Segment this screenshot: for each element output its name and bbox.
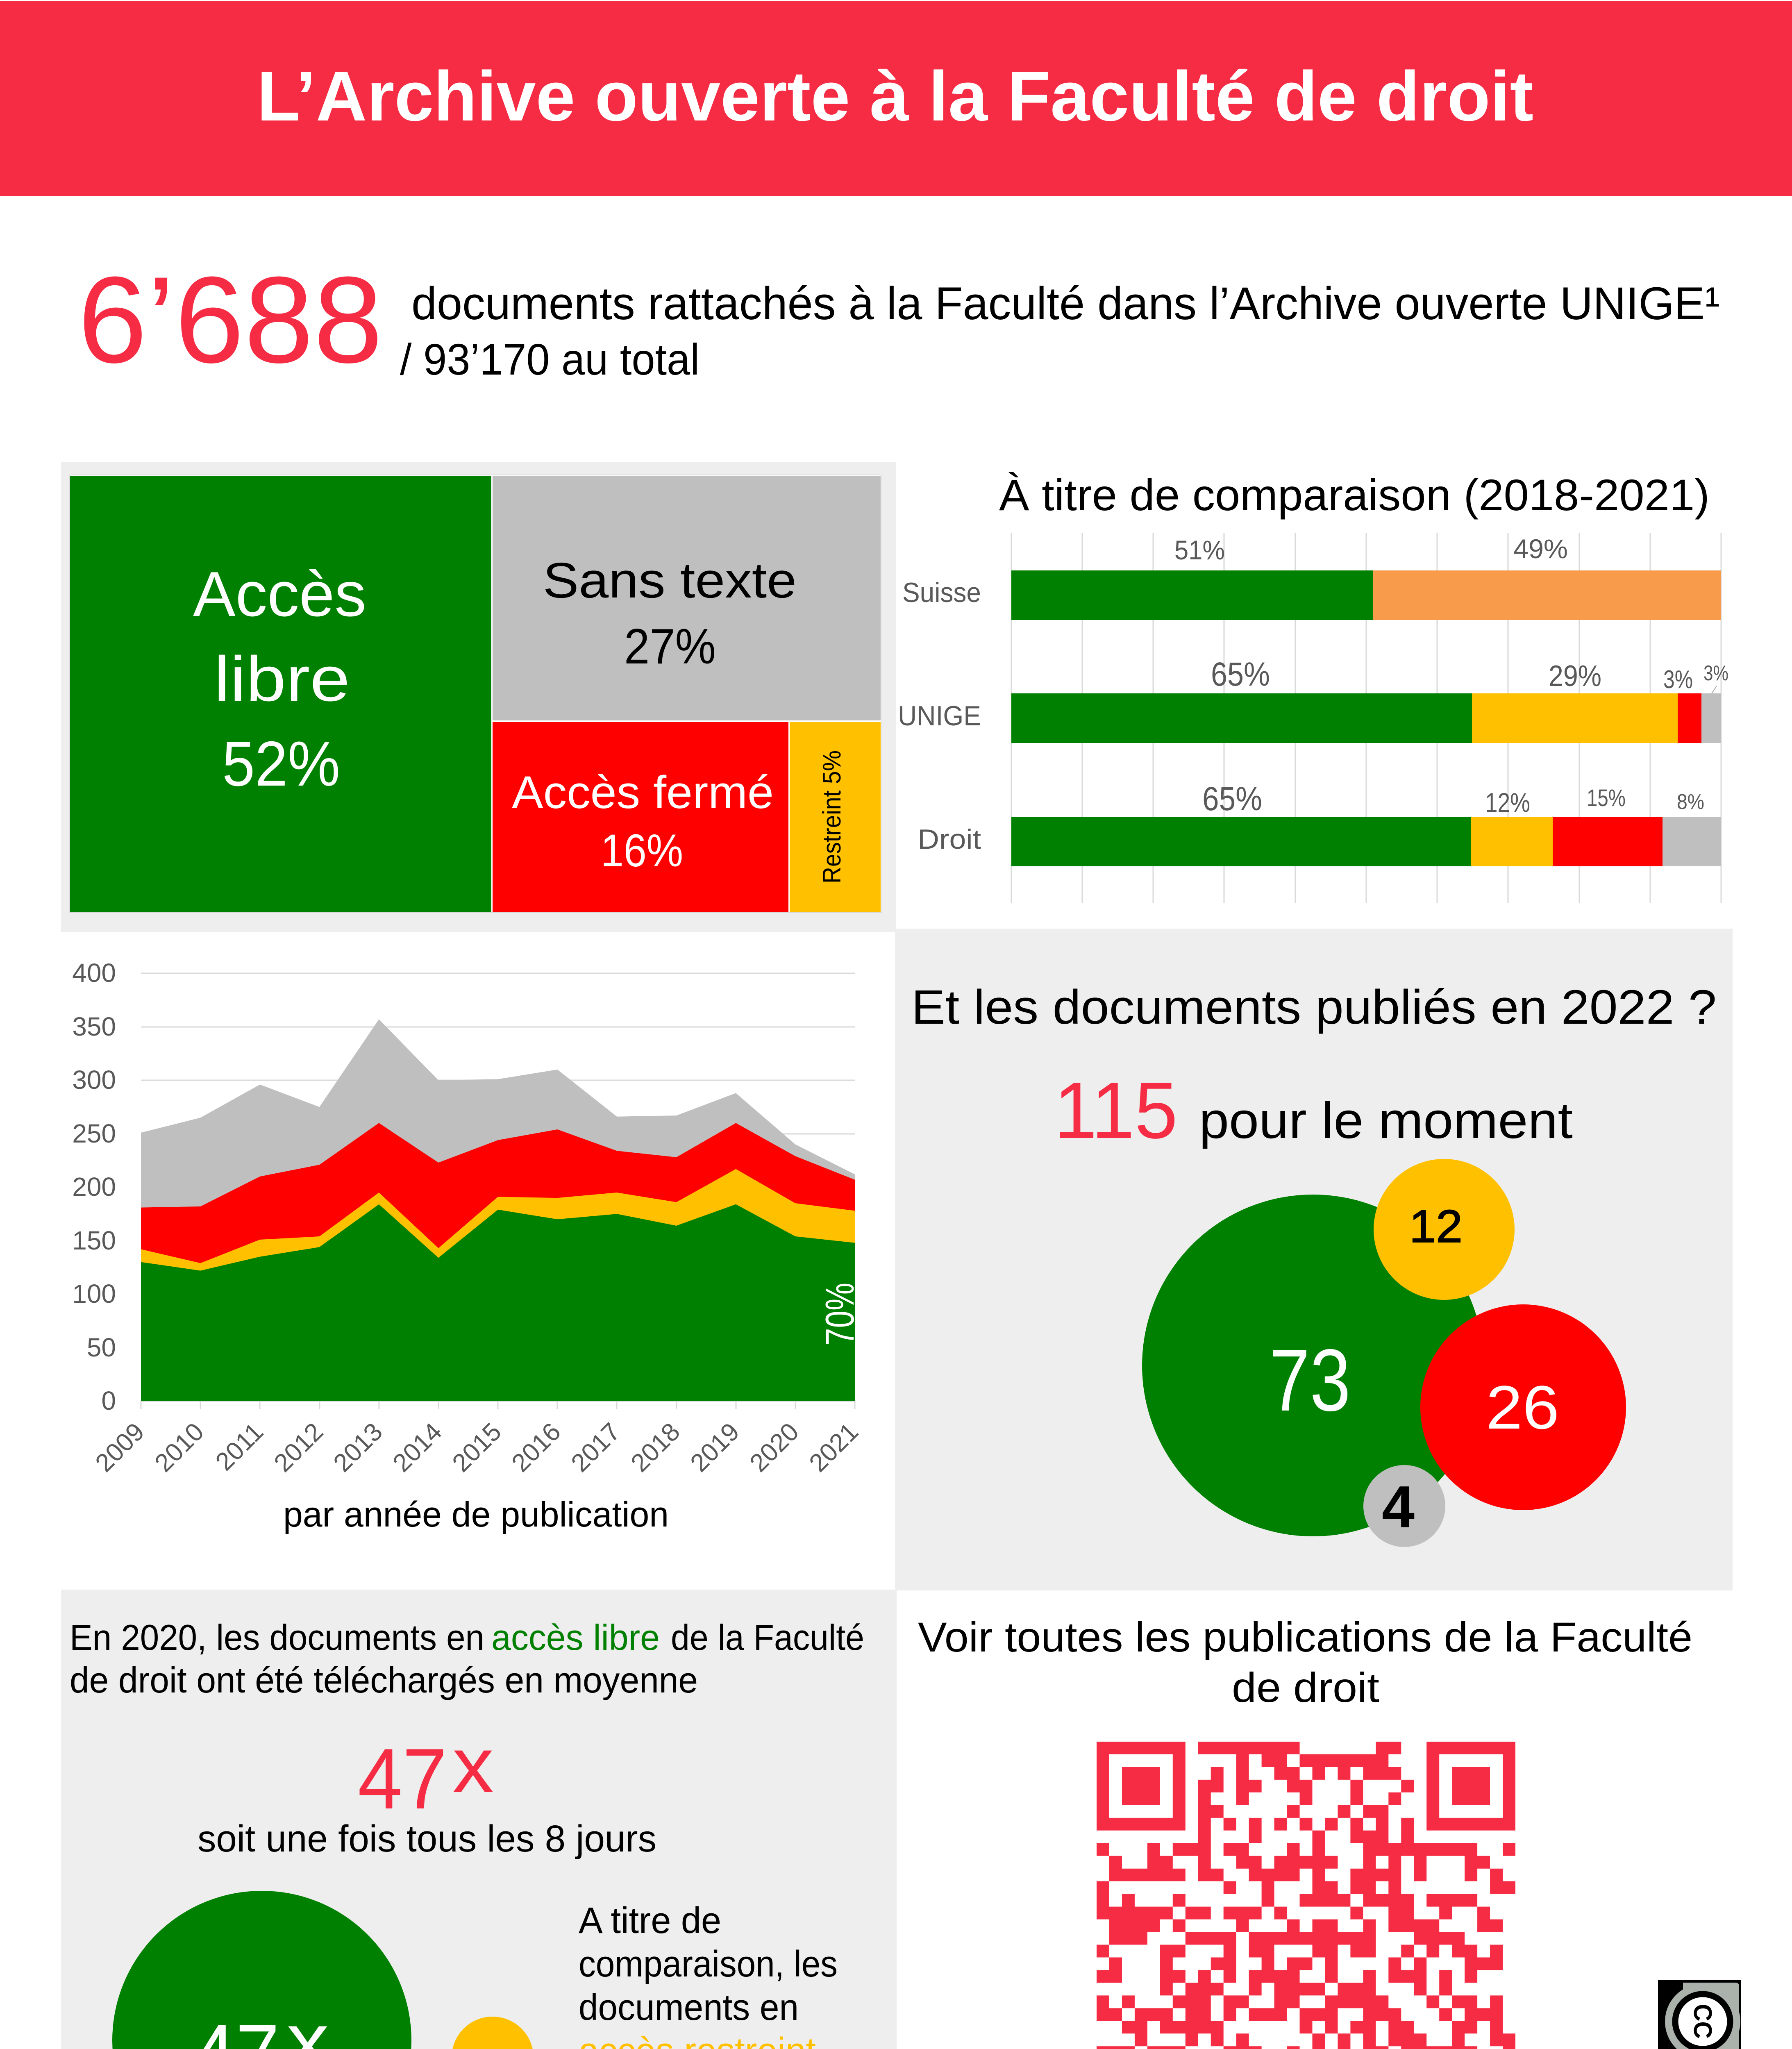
y axis labels: 350	[72, 1012, 116, 1041]
bar: UNIGE: 3%	[1703, 661, 1728, 685]
label 70%: 70%	[817, 1283, 862, 1345]
QR heading	[918, 1614, 1692, 1711]
stacked areas	[141, 1019, 855, 1401]
x axis labels: 2016	[506, 1417, 566, 1477]
x axis labels: 2020	[745, 1417, 804, 1477]
for now text: pour le moment	[1199, 1092, 1573, 1149]
bar: Droit: 15%	[1587, 785, 1626, 811]
intro text: de droit ont été téléchargés en moyenne	[70, 1660, 698, 1700]
comparison text: comparaison, les	[579, 1944, 838, 1985]
bar: Droit: 8%	[1677, 790, 1704, 814]
bubble: restreint 12	[1374, 1159, 1515, 1300]
x axis labels: 2018	[626, 1417, 686, 1477]
treemap cell: accès libre: Accès	[193, 559, 366, 629]
y axis labels: 200	[72, 1172, 116, 1202]
intro text: de la Faculté	[671, 1617, 864, 1658]
x axis labels	[90, 1417, 864, 1477]
x axis labels: 2014	[388, 1417, 447, 1477]
bubble: 47x	[112, 1891, 411, 2049]
title: L’Archive ouverte à la Faculté de droit	[257, 57, 1533, 136]
x axis labels: 2009	[90, 1417, 150, 1477]
treemap cell: accès fermé: 16%	[601, 825, 683, 876]
icon: CC: CC	[1688, 2004, 1717, 2039]
treemap cell: sans texte	[493, 476, 881, 720]
treemap cell: accès fermé	[493, 722, 788, 912]
key figure: total documents	[78, 251, 1720, 388]
icon: CC	[1675, 1994, 1730, 2049]
intro text	[70, 1617, 864, 1700]
bubble: libre 73	[1142, 1195, 1484, 1536]
x axis labels: 2010	[150, 1417, 209, 1477]
heading: Et les documents publiés en 2022 ?	[911, 980, 1717, 1034]
bar: UNIGE: 29%	[1549, 660, 1601, 693]
bar: Droit: Droit	[918, 824, 981, 855]
x axis labels: 2021	[804, 1417, 864, 1477]
figure 47x: 47	[358, 1731, 447, 1827]
number 115: 115	[1054, 1065, 1178, 1155]
comparison text: documents en	[579, 1987, 799, 2028]
y axis labels: 250	[72, 1119, 116, 1148]
treemap cell: accès libre	[70, 476, 491, 912]
x axis labels: 2012	[269, 1417, 329, 1477]
bubble: 2x	[452, 2017, 534, 2049]
bar: Suisse	[902, 534, 1721, 620]
y axis labels: 50	[87, 1333, 116, 1362]
total count: / 93’170 au total	[400, 334, 700, 384]
bar: UNIGE	[898, 656, 1728, 743]
y axis labels	[72, 958, 116, 1415]
x axis labels: 2015	[447, 1417, 507, 1477]
treemap cell: restreint: Restreint 5%	[818, 750, 846, 884]
documents description: documents rattachés à la Faculté dans l’Archive ouverte UNIGE¹	[411, 278, 1720, 329]
figure 47x	[358, 1721, 494, 1827]
big number 6'688: 6’688	[78, 251, 383, 388]
figure 47x: x	[452, 1721, 494, 1809]
frequency text: soit une fois tous les 8 jours	[198, 1818, 656, 1860]
bar: Suisse: Suisse	[902, 577, 981, 608]
comparison heading: À titre de comparaison (2018-2021)	[999, 470, 1710, 520]
x axis labels: 2019	[685, 1417, 745, 1477]
bar: Droit: 65%	[1202, 780, 1262, 818]
header band with title	[0, 1, 1792, 196]
y axis labels: 100	[72, 1279, 116, 1308]
panel: documents published in 2022	[895, 929, 1733, 1590]
comparison text	[579, 1900, 838, 2049]
y axis labels: 400	[72, 958, 116, 988]
icon: Creative Commons BY-SA badge	[1658, 1980, 1741, 2049]
QR code	[1097, 1748, 1515, 2049]
bubble: fermé 26	[1420, 1304, 1626, 1510]
x axis labels: 2013	[328, 1417, 388, 1477]
bar: UNIGE: 3%	[1663, 666, 1693, 694]
bar: UNIGE: 65%	[1211, 656, 1270, 693]
treemap cell: restreint	[790, 722, 881, 912]
bar: Droit	[918, 780, 1721, 866]
bubble: sans texte 4: 4	[1382, 1474, 1415, 1540]
panel: link to publications with QR code	[918, 1614, 1692, 2049]
treemap cell: accès libre: 52%	[222, 728, 340, 799]
treemap cell: sans texte: Sans texte	[543, 552, 797, 608]
x axis labels: 2011	[210, 1417, 269, 1476]
QR heading: Voir toutes les publications de la Faculté	[918, 1614, 1692, 1661]
bar: UNIGE: UNIGE	[898, 700, 981, 731]
y axis labels: 0	[101, 1386, 116, 1415]
intro text: accès libre	[491, 1617, 660, 1658]
y axis labels: 300	[72, 1065, 116, 1095]
panel: downloads in 2020	[61, 1590, 897, 2049]
panel: comparison stacked bars 2018-2021	[898, 470, 1728, 903]
treemap cell: sans texte: 27%	[624, 618, 716, 674]
y axis labels: 150	[72, 1226, 116, 1255]
bar: Droit: 12%	[1485, 787, 1530, 818]
bubble: fermé 26: 26	[1486, 1373, 1559, 1442]
comparison text: A titre de	[579, 1900, 721, 1941]
bar: Suisse: 51%	[1174, 535, 1225, 565]
x axis labels: 2017	[566, 1417, 626, 1477]
bubble: restreint 12: 12	[1409, 1201, 1463, 1252]
QR heading: de droit	[1232, 1664, 1379, 1711]
treemap cell: accès fermé: Accès fermé	[512, 767, 774, 818]
bar: Suisse: 49%	[1513, 534, 1568, 564]
intro text: En 2020, les documents en	[70, 1617, 484, 1658]
bubble: sans texte 4	[1363, 1465, 1445, 1547]
bubble: libre 73: 73	[1269, 1331, 1351, 1429]
treemap cell: accès libre: libre	[214, 643, 350, 714]
panel: treemap of access types	[61, 462, 896, 932]
panel: stacked area chart by publication year	[72, 958, 864, 1534]
chart caption: par année de publication	[283, 1495, 669, 1534]
